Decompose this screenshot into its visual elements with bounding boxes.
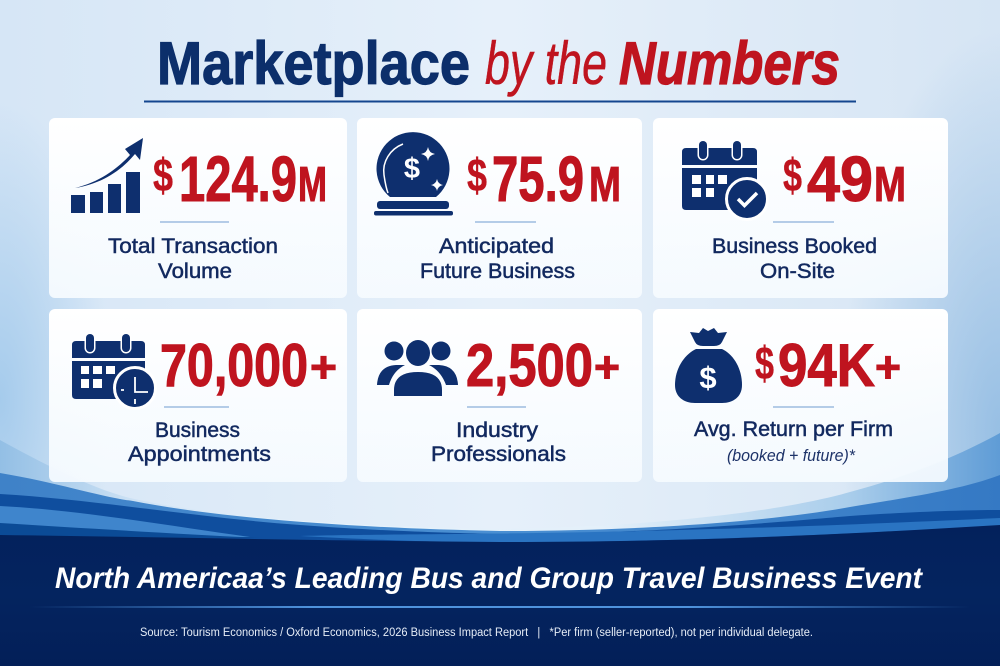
title: Numbers [619, 30, 840, 97]
title: Marketplace [157, 30, 470, 97]
value: $ [783, 149, 802, 201]
value: 49 [807, 143, 873, 215]
value: 75.9 [492, 143, 584, 215]
value: 70,000 [160, 332, 308, 399]
icon: money bag [675, 328, 742, 403]
panel: average return per firm [653, 309, 948, 482]
label [694, 418, 893, 465]
label: Total Transaction [108, 235, 278, 258]
label: (booked + future)* [727, 447, 856, 465]
icon: calendar with check [682, 141, 768, 220]
value: $ [467, 149, 487, 201]
icon: money bag: $ [699, 360, 717, 395]
value [783, 143, 906, 215]
title [157, 30, 840, 97]
value: M [298, 158, 327, 212]
label: On-Site [760, 260, 835, 283]
panel: business booked on-site [653, 118, 948, 298]
label: Appointments [128, 443, 271, 466]
footer banner [0, 525, 1000, 666]
panel: industry professionals [357, 309, 642, 482]
value: + [594, 343, 620, 392]
value: 124.9 [179, 143, 297, 215]
label: Industry [456, 419, 539, 442]
value: M [874, 158, 906, 212]
label [712, 235, 877, 283]
value: 2,500 [466, 332, 593, 399]
label: Volume [158, 260, 232, 283]
label [128, 419, 271, 466]
label [420, 235, 575, 283]
label: Anticipated [439, 235, 554, 258]
label: Professionals [431, 443, 566, 466]
label [108, 235, 278, 283]
value: $ [153, 149, 173, 201]
icon: group of people [377, 340, 458, 396]
icon: growth bars with arrow [71, 138, 143, 213]
icon: crystal ball with dollar: $ [404, 153, 420, 185]
label: Business Booked [712, 235, 877, 258]
label: Future Business [420, 260, 575, 283]
value: + [875, 343, 901, 392]
banner tagline: North Americaa’s Leading Bus and Group Travel Business Event [55, 562, 924, 595]
label: Business [155, 419, 240, 442]
value: + [310, 343, 337, 392]
panel: total transaction volume [49, 118, 347, 298]
title: by the [485, 30, 607, 97]
panel: business appointments [49, 309, 347, 482]
decorative waves [0, 433, 1000, 560]
label: Avg. Return per Firm [694, 418, 893, 441]
icon: calendar with clock [72, 334, 156, 408]
source note: Source: Tourism Economics / Oxford Economics, 2026 Business Impact Report | *Per firm (seller-reported), not per individual delegate. [140, 627, 813, 639]
value: M [589, 158, 621, 212]
label [431, 419, 566, 466]
value: $ [755, 337, 774, 389]
panel: anticipated future business [357, 118, 642, 298]
value: 94K [778, 332, 875, 399]
icon: crystal ball with dollar [374, 132, 453, 216]
